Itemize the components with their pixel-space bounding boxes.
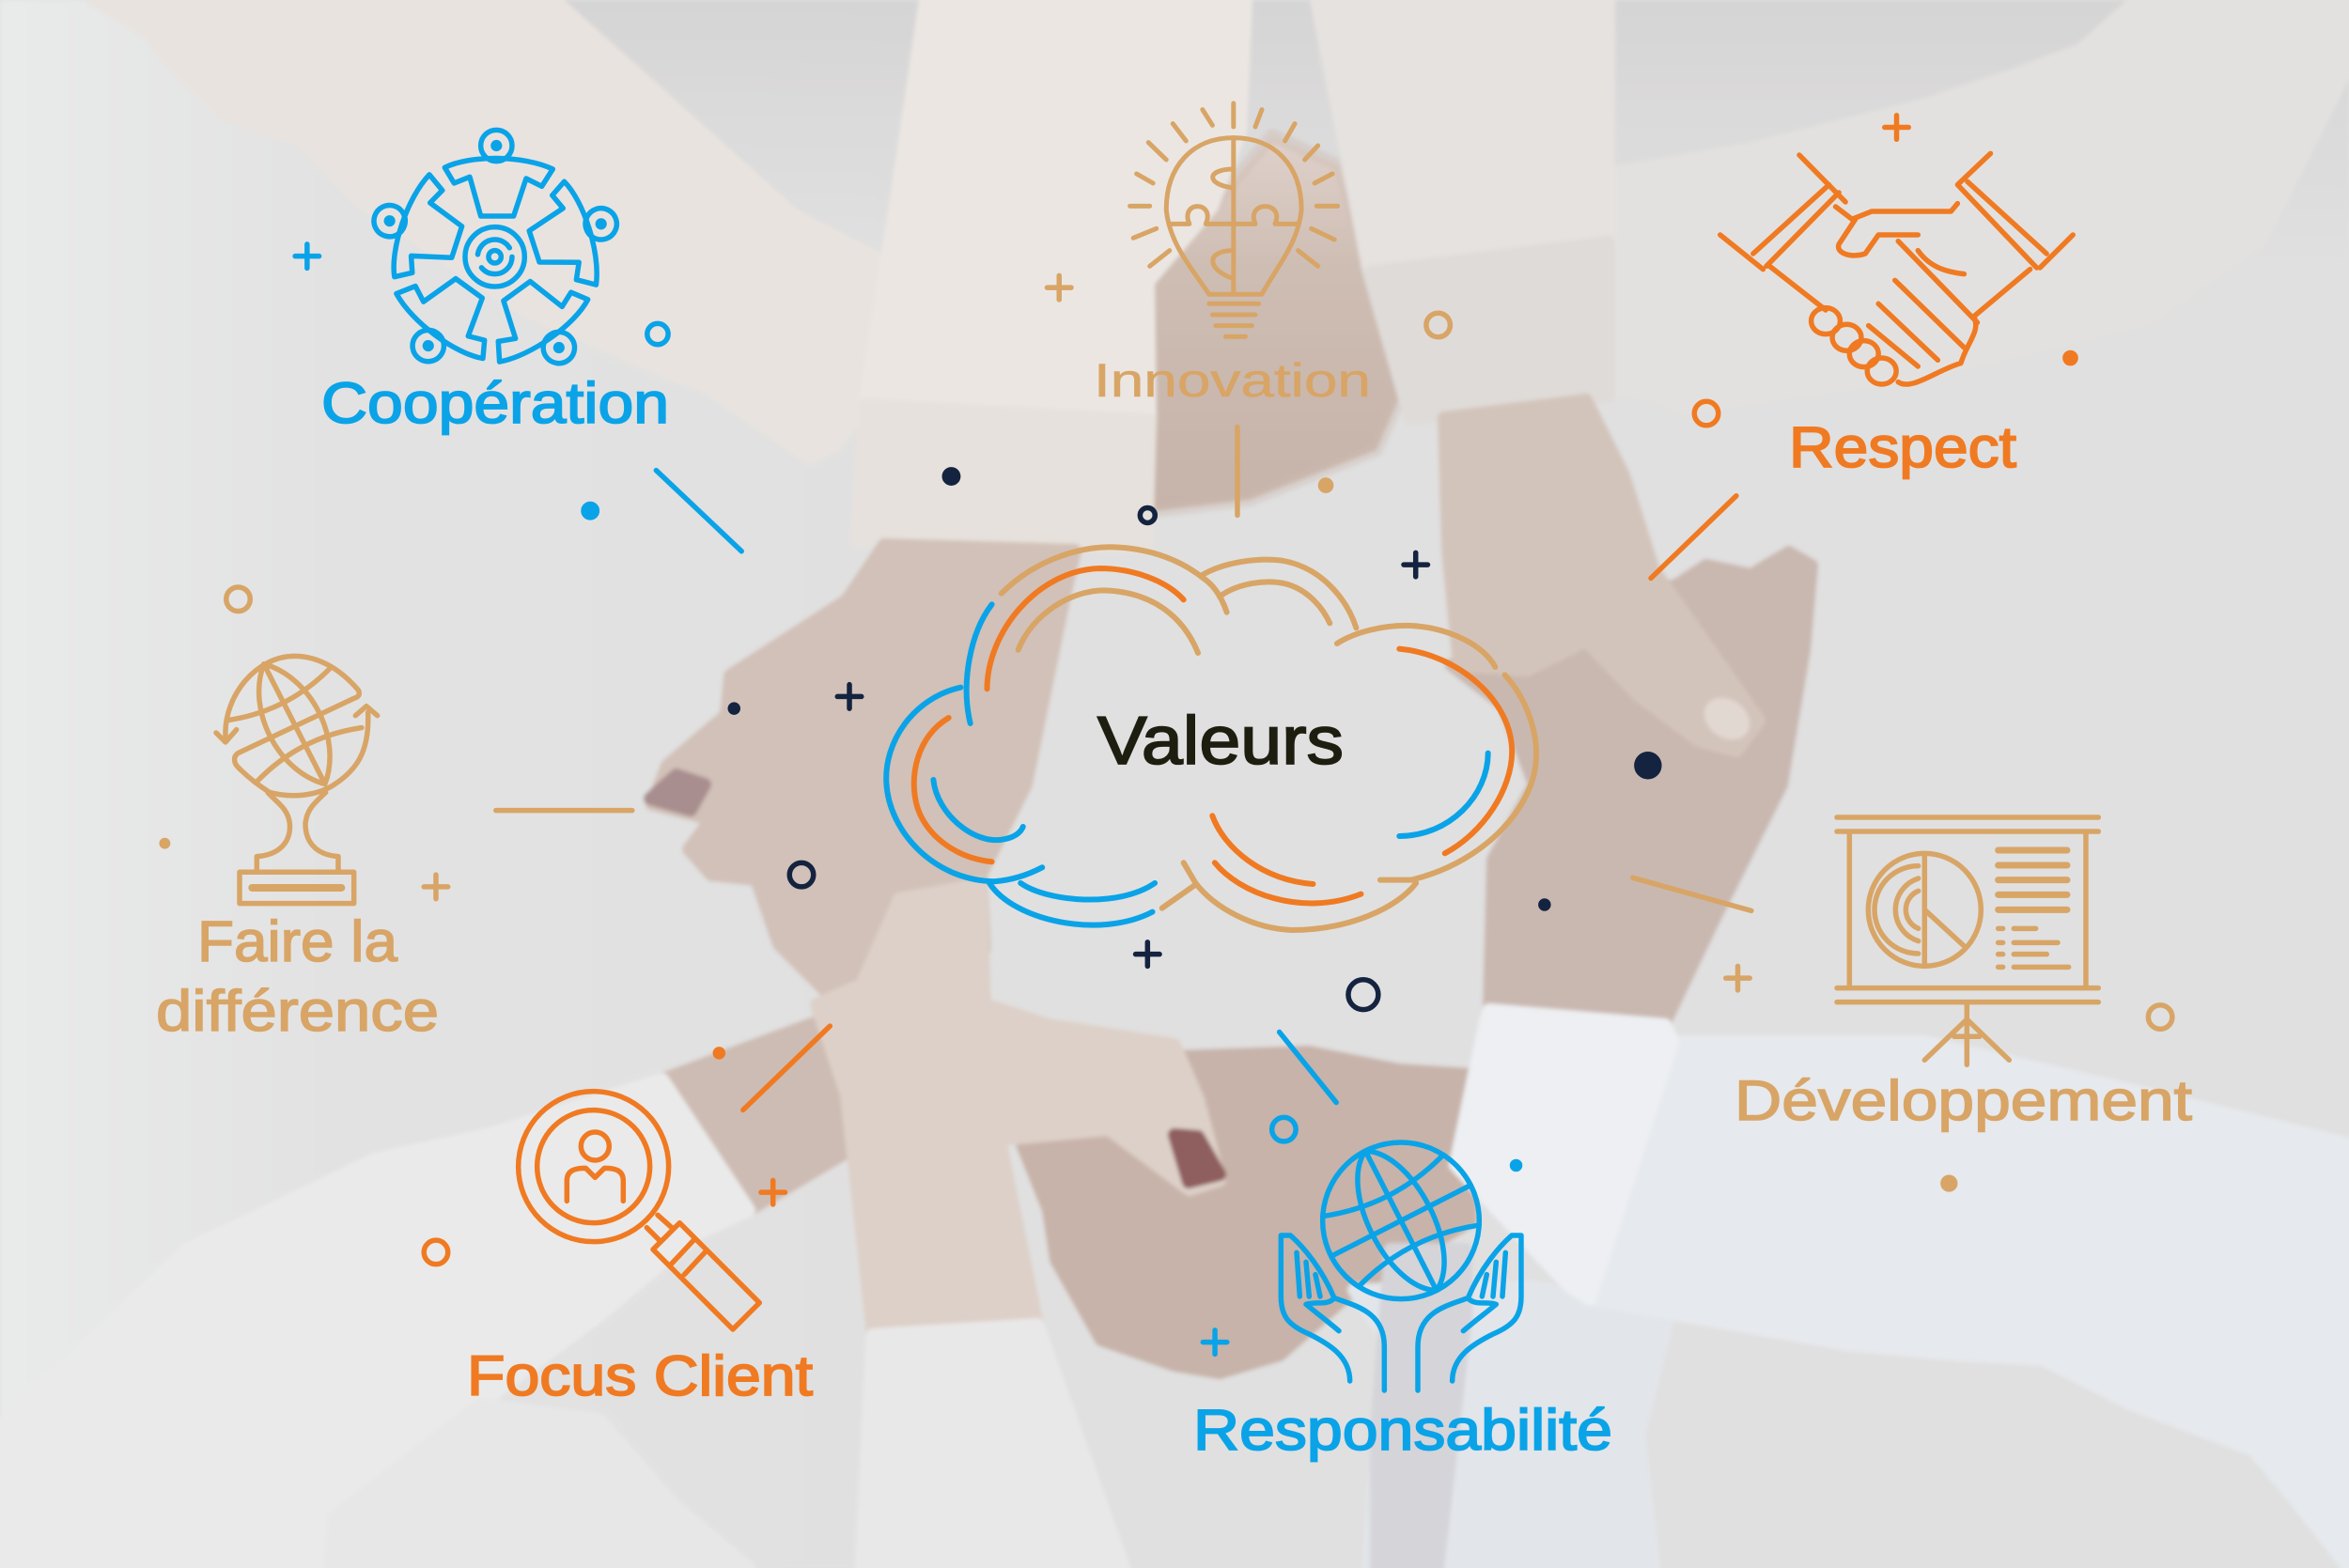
value: Innovation — [1094, 103, 1371, 407]
icon: globe in hands — [1281, 1115, 1521, 1390]
value: Coopération — [321, 130, 669, 435]
cloud title: Valeurs — [1097, 704, 1344, 779]
icon: handshake — [1720, 153, 2073, 384]
label: Responsabilité — [1193, 1398, 1612, 1462]
value: Focus Client — [467, 1092, 813, 1407]
label: Coopération — [321, 371, 669, 435]
label: Respect — [1789, 415, 2016, 479]
icon: puzzle light bulb — [1130, 103, 1338, 336]
label: Faire la — [197, 909, 397, 973]
label: Focus Client — [467, 1344, 813, 1407]
label: Développement — [1735, 1069, 2192, 1132]
label: différence — [156, 979, 439, 1043]
icon: presentation board — [1837, 817, 2098, 1064]
accent marks: plus signs, rings, dots and dashes — [162, 116, 2172, 1354]
label: Innovation — [1094, 354, 1371, 407]
value: Respect — [1720, 153, 2073, 479]
central cloud: Valeurs — [886, 547, 1536, 930]
icon: magnifier with person — [519, 1092, 759, 1329]
value: Responsabilité — [1193, 1115, 1612, 1462]
value: Faire la différence — [156, 638, 439, 1043]
icon: globe trophy — [212, 638, 378, 904]
icon: team circle — [359, 130, 633, 394]
value: Développement — [1735, 817, 2192, 1132]
